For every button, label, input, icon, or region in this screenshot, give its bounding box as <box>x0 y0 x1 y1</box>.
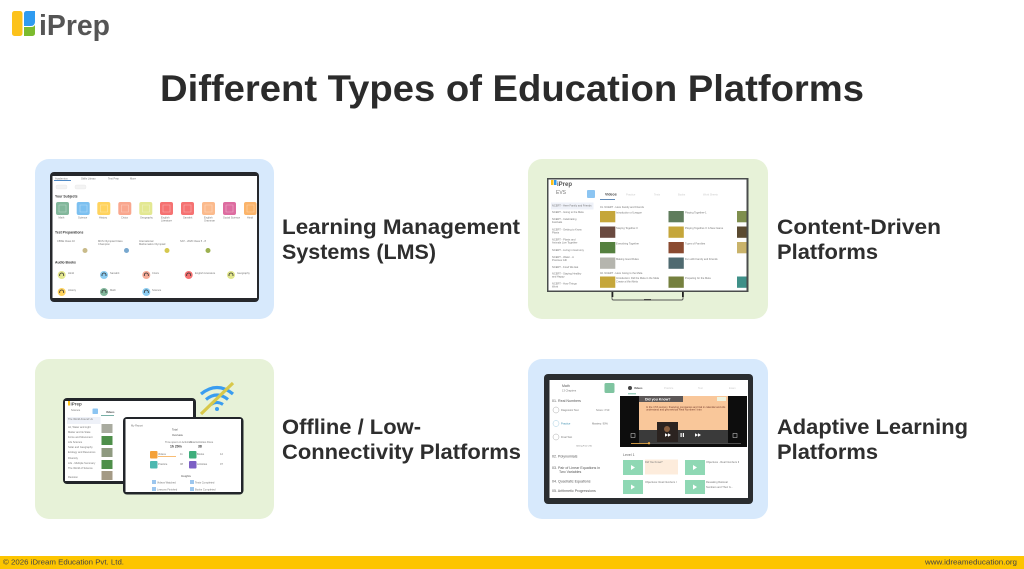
front tablet: progress report: 38 <box>198 444 202 448</box>
tablet showing LMS dashboard: Hindi <box>68 271 74 275</box>
tablet showing LMS dashboard: Test Preparations <box>55 230 84 234</box>
tablet showing adaptive course: Diagnostic Test <box>561 408 579 412</box>
panel: content-driven platforms <box>528 159 768 319</box>
tablet showing LMS dashboard: English Literature <box>195 271 216 275</box>
front tablet: progress report: My Report <box>131 424 143 428</box>
TV showing video library <box>547 178 748 292</box>
tablet showing LMS dashboard: Skills Library <box>81 176 96 180</box>
TV showing video library: Tests <box>654 192 661 196</box>
tablet showing LMS dashboard: Champion <box>98 242 110 246</box>
front tablet: progress report: 07 <box>220 462 223 466</box>
TV showing video library: Playing Together-1 <box>685 210 707 214</box>
front tablet: progress report: Lessons Finished <box>157 488 178 492</box>
TV showing video library: iPrep <box>557 182 572 188</box>
TV showing video library: Videos <box>605 192 617 196</box>
tablet showing LMS dashboard: Science <box>152 288 162 292</box>
video player: In the 17th century, financing companies and risk in calendar and oils <box>646 405 726 409</box>
TV showing video library: NCERT - Staying Healthy <box>552 272 582 276</box>
TV showing video library: Festivals <box>552 220 563 224</box>
front tablet: progress report: Total Activities Done <box>190 440 214 444</box>
TV showing video library: EVS <box>556 190 567 196</box>
TV showing video library: Making Good Rules <box>616 257 639 261</box>
tablet showing LMS dashboard: SAT - 2026 Class 5 - 8 <box>180 239 207 243</box>
TV showing video library: NCERT - How Things <box>552 282 577 286</box>
tablet showing adaptive course: Math <box>562 384 570 388</box>
TV showing video library: Practice <box>626 192 636 196</box>
heading: adaptive: Adaptive Learning <box>777 416 968 439</box>
tablet showing adaptive course: Objectives: Real Numbers I <box>645 480 677 484</box>
tablet showing adaptive course: Objectives - Real Numbers II <box>706 460 739 464</box>
tablet showing LMS dashboard: English <box>204 216 213 220</box>
tablet showing LMS dashboard: Mathematics Olympiad <box>139 242 166 246</box>
tablet showing adaptive course: 05. Arithmetic Progressions <box>552 489 596 493</box>
front tablet: progress report: Tests Completed <box>195 480 215 484</box>
tablet showing LMS dashboard: International <box>139 239 154 243</box>
front tablet: progress report: Insights <box>181 474 192 478</box>
back tablet: subject list: Air, Water and Light <box>68 425 91 429</box>
back tablet: subject list: Force and Movement <box>68 435 93 439</box>
front tablet: progress report: Activities <box>197 462 208 466</box>
footer bar: www.idreameducation.org <box>924 558 1017 566</box>
back tablet: subject list: Science <box>71 408 81 412</box>
TV showing video library: 01. NCERT - Here Family and Friends <box>600 205 645 209</box>
back tablet: subject list: iPrep <box>70 402 82 406</box>
tablet showing adaptive course: Two Variables <box>559 470 582 474</box>
TV showing video library: Work <box>552 284 559 288</box>
front tablet: progress report: Videos <box>158 452 167 456</box>
tablet showing LMS dashboard: Your Subjects <box>55 194 78 198</box>
heading: LMS <box>282 216 520 264</box>
tablet showing LMS dashboard: Geography <box>237 271 251 275</box>
tablet showing LMS dashboard: Sanskrit <box>110 271 120 275</box>
TV showing video library: Staying Together-II <box>616 226 638 230</box>
TV showing video library: Create a Mini Mela <box>616 280 638 284</box>
back tablet: subject list <box>63 398 196 484</box>
TV showing video library: Types of Families <box>685 242 706 246</box>
tablet showing adaptive course: Numbers and Their G... <box>706 485 733 489</box>
front tablet: progress report: 11 <box>180 452 183 456</box>
back tablet: subject list: The World Around Us <box>68 417 93 421</box>
panel background <box>35 359 274 519</box>
logo: iPrep: iPrep <box>39 10 110 42</box>
tablet showing adaptive course: Level 1 <box>623 453 635 457</box>
tablet showing adaptive course <box>544 374 753 504</box>
heading: content-driven: Platforms <box>777 241 878 264</box>
tablet showing adaptive course: 01. Real Numbers <box>552 399 581 403</box>
front tablet: progress report: Practice <box>158 462 168 466</box>
panel background <box>35 159 274 319</box>
TV showing video library: 02. NCERT - Here Going to the Mela <box>600 271 643 275</box>
TV showing video library: NCERT - Food We Eat <box>552 265 579 269</box>
back tablet: subject list: Solar and Geography <box>68 445 93 449</box>
heading: offline: Connectivity Platforms <box>282 441 521 464</box>
tablet showing LMS dashboard: History <box>68 288 77 292</box>
icon: wifi off <box>201 383 233 414</box>
tablet showing adaptive course: Getting Free CTA <box>576 444 592 448</box>
back tablet: subject list: Life - Multiple Summary <box>68 461 96 465</box>
front tablet: progress report <box>123 417 244 494</box>
panel background <box>528 359 768 519</box>
TV showing video library: NCERT - Here Family and Friends <box>552 204 592 208</box>
heading: content-driven: Content-Driven <box>777 216 941 239</box>
video player <box>620 396 747 447</box>
back tablet: subject list: Videos <box>106 410 115 414</box>
tablet showing adaptive course: Did You Know? <box>645 460 663 464</box>
tablet showing LMS dashboard: Sanskrit <box>183 216 193 220</box>
tablet showing LMS dashboard: MCS Olympiad Class <box>98 239 123 243</box>
heading: offline <box>282 416 521 464</box>
front tablet: progress report: Videos Watched <box>157 480 176 484</box>
TV showing video library: NCERT - Plants and <box>552 238 576 242</box>
footer bar: © 2026 iDream Education Pvt. Ltd. <box>3 558 124 566</box>
tablet showing LMS dashboard: Academics <box>55 176 68 180</box>
heading: content-driven <box>777 216 941 264</box>
TV stand <box>612 292 684 300</box>
tablet showing LMS dashboard: Civics <box>121 216 129 220</box>
back tablet: subject list: Matter and its State <box>68 430 91 434</box>
front tablet: progress report: Overview <box>172 433 183 437</box>
TV showing video library: NCERT - Celebrating <box>552 217 577 221</box>
panel background <box>528 159 768 319</box>
front tablet: progress report: 1h 20m <box>170 444 182 448</box>
tablet showing adaptive course: Revealing Rational <box>706 480 728 484</box>
TV showing video library: Fun with Family and Friends <box>685 257 718 261</box>
tablet showing LMS dashboard: Audio Books <box>55 260 76 264</box>
panel: learning management systems <box>35 159 274 319</box>
TV showing video library: NCERT - Getting to Know <box>552 228 582 232</box>
tablet showing LMS dashboard: CBSE Class 10 <box>57 239 75 243</box>
TV showing video library: NCERT - Living in Harmony <box>552 248 585 252</box>
tablet showing adaptive course: Videos <box>634 386 643 390</box>
back tablet: subject list: The World of Science <box>68 466 93 470</box>
tablet showing adaptive course: Exam <box>729 386 736 390</box>
tablet showing adaptive course: Score: 7/10 <box>596 408 610 412</box>
tablet showing adaptive course: 03. Pair of Linear Equations in <box>552 466 600 470</box>
back tablet: subject list: Ecology and Resources <box>68 450 96 454</box>
heading: adaptive: Platforms <box>777 441 878 464</box>
panel: offline / low-connectivity platforms <box>35 359 274 519</box>
video player: Did you Know? <box>645 398 670 402</box>
tablet showing LMS dashboard: Civics <box>152 271 160 275</box>
front tablet: progress report: 12 <box>220 452 223 456</box>
TV showing video library: Introduction: Did the Mela in the Mela <box>616 276 660 280</box>
tablet showing adaptive course: Test <box>698 386 703 390</box>
tablet showing LMS dashboard <box>50 172 259 302</box>
footer bar <box>0 556 1024 569</box>
tablet showing adaptive course: 04. Quadratic Equations <box>552 480 591 484</box>
tablet showing LMS dashboard: History <box>99 216 108 220</box>
tablet showing LMS dashboard: Math <box>58 216 65 220</box>
tablet showing LMS dashboard: Literature <box>161 218 173 222</box>
tablet showing LMS dashboard: Hindi <box>247 216 253 220</box>
TV showing video library: NCERT - Going to the Mela <box>552 210 584 214</box>
tablet showing adaptive course: Final Test <box>561 435 572 439</box>
tablet showing LMS dashboard: Geography <box>140 216 154 220</box>
tablet showing adaptive course: Practice <box>664 386 674 390</box>
TV showing video library: Precious Gift <box>552 258 567 262</box>
video player: understand and geometrical Real Numbers' Intro <box>646 408 702 412</box>
front tablet: progress report: Books Completed <box>195 488 216 492</box>
TV showing video library: Everything Together <box>616 242 639 246</box>
tablet showing LMS dashboard: Test Prep <box>108 176 120 180</box>
heading: adaptive <box>777 416 968 464</box>
heading: offline: Offline / Low- <box>282 416 421 439</box>
TV showing video library: Animals Live Together <box>552 240 578 244</box>
TV showing video library: Plants <box>552 230 560 234</box>
tablet showing adaptive course: Mastery: 90% <box>592 422 609 426</box>
TV showing video library: NCERT - Water - A <box>552 255 574 259</box>
tablet showing LMS dashboard: Math <box>110 288 116 292</box>
TV showing video library: Preparing for the Mela <box>685 276 711 280</box>
tablet showing LMS dashboard: More <box>130 176 136 180</box>
front tablet: progress report: Books <box>197 452 205 456</box>
TV showing video library: and Happy <box>552 274 565 278</box>
tablet showing LMS dashboard: Science <box>78 216 88 220</box>
front tablet: progress report: Total <box>172 428 178 432</box>
tablet showing LMS dashboard: Grammar <box>204 218 215 222</box>
tablet showing adaptive course: 02. Polynomials <box>552 454 578 458</box>
heading: LMS: Learning Management <box>282 216 520 239</box>
heading: LMS: Systems (LMS) <box>282 241 436 264</box>
tablet showing LMS dashboard: English <box>161 216 170 220</box>
TV showing video library: Work Sheets <box>703 192 719 196</box>
TV showing video library: Playing Together-II: A New Game <box>685 226 724 230</box>
tablet showing adaptive course: Practice <box>561 422 571 426</box>
tablet showing adaptive course: 13 Chapters <box>562 388 577 392</box>
back tablet: subject list: Life Science <box>68 440 83 444</box>
TV showing video library: Introduction of League <box>616 210 642 214</box>
tablet showing LMS dashboard: Social Science <box>223 216 241 220</box>
front tablet: progress report: Time spent on Activities <box>165 440 193 444</box>
front tablet: progress report: 08 <box>180 462 183 466</box>
TV showing video library: Books <box>678 192 686 196</box>
back tablet: subject list: Diversity <box>68 456 79 460</box>
panel: adaptive learning platforms <box>528 359 768 519</box>
title: Different Types of Education Platforms <box>160 68 864 109</box>
back tablet: subject list: Revision <box>68 475 79 479</box>
